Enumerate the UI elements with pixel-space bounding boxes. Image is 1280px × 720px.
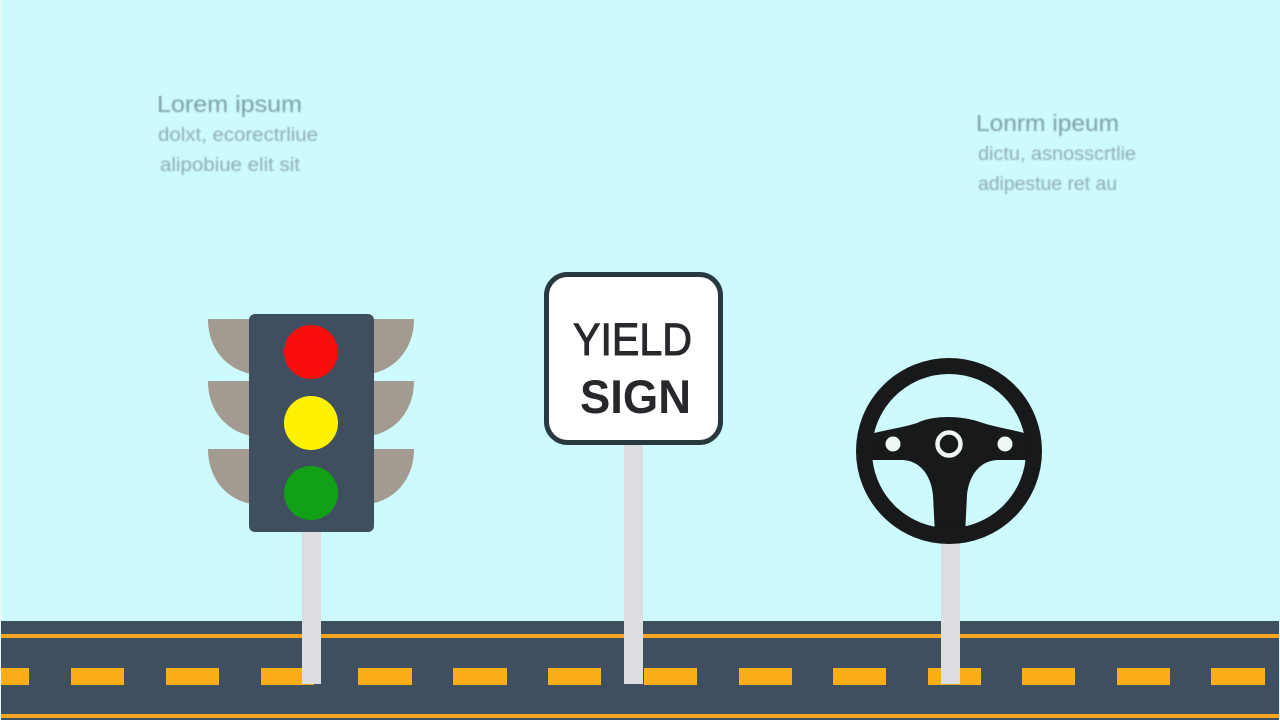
traffic light pole: [302, 530, 321, 684]
left caption line 1: dolxt, ecorectrliue: [158, 125, 318, 146]
red light: [284, 325, 338, 379]
yield sign panel: [546, 274, 720, 442]
left caption line 2: alipobiue elit sit: [160, 155, 301, 176]
road: [1, 621, 1279, 720]
right caption line 2: adipestue ret au: [978, 174, 1117, 195]
traffic light housing: [249, 314, 374, 532]
yield sign text: YIELD: [573, 314, 692, 365]
text block: left caption: [157, 91, 318, 176]
right caption line 1: dictu, asnosscrtlie: [978, 144, 1136, 165]
steering wheel rim: [864, 366, 1034, 536]
green light: [284, 466, 338, 520]
traffic light left visors: [208, 319, 252, 504]
left caption heading: Lorem ipsum: [157, 91, 302, 117]
traffic light: [208, 314, 414, 684]
yield sign pole: [624, 443, 643, 684]
yield sign: [546, 274, 720, 684]
yield sign text: [573, 314, 692, 423]
yellow light: [284, 396, 338, 450]
steering wheel pole: [941, 540, 960, 684]
right button: [998, 436, 1012, 452]
traffic light right visors: [370, 319, 414, 504]
steering wheel hub and spokes: [866, 417, 1032, 535]
center ring: [938, 432, 960, 456]
right caption heading: Lonrm ipeum: [976, 110, 1119, 136]
left button: [886, 436, 900, 452]
yield sign text: SIGN: [580, 370, 691, 423]
text block: right caption: [976, 110, 1136, 195]
steering wheel: [864, 366, 1034, 684]
